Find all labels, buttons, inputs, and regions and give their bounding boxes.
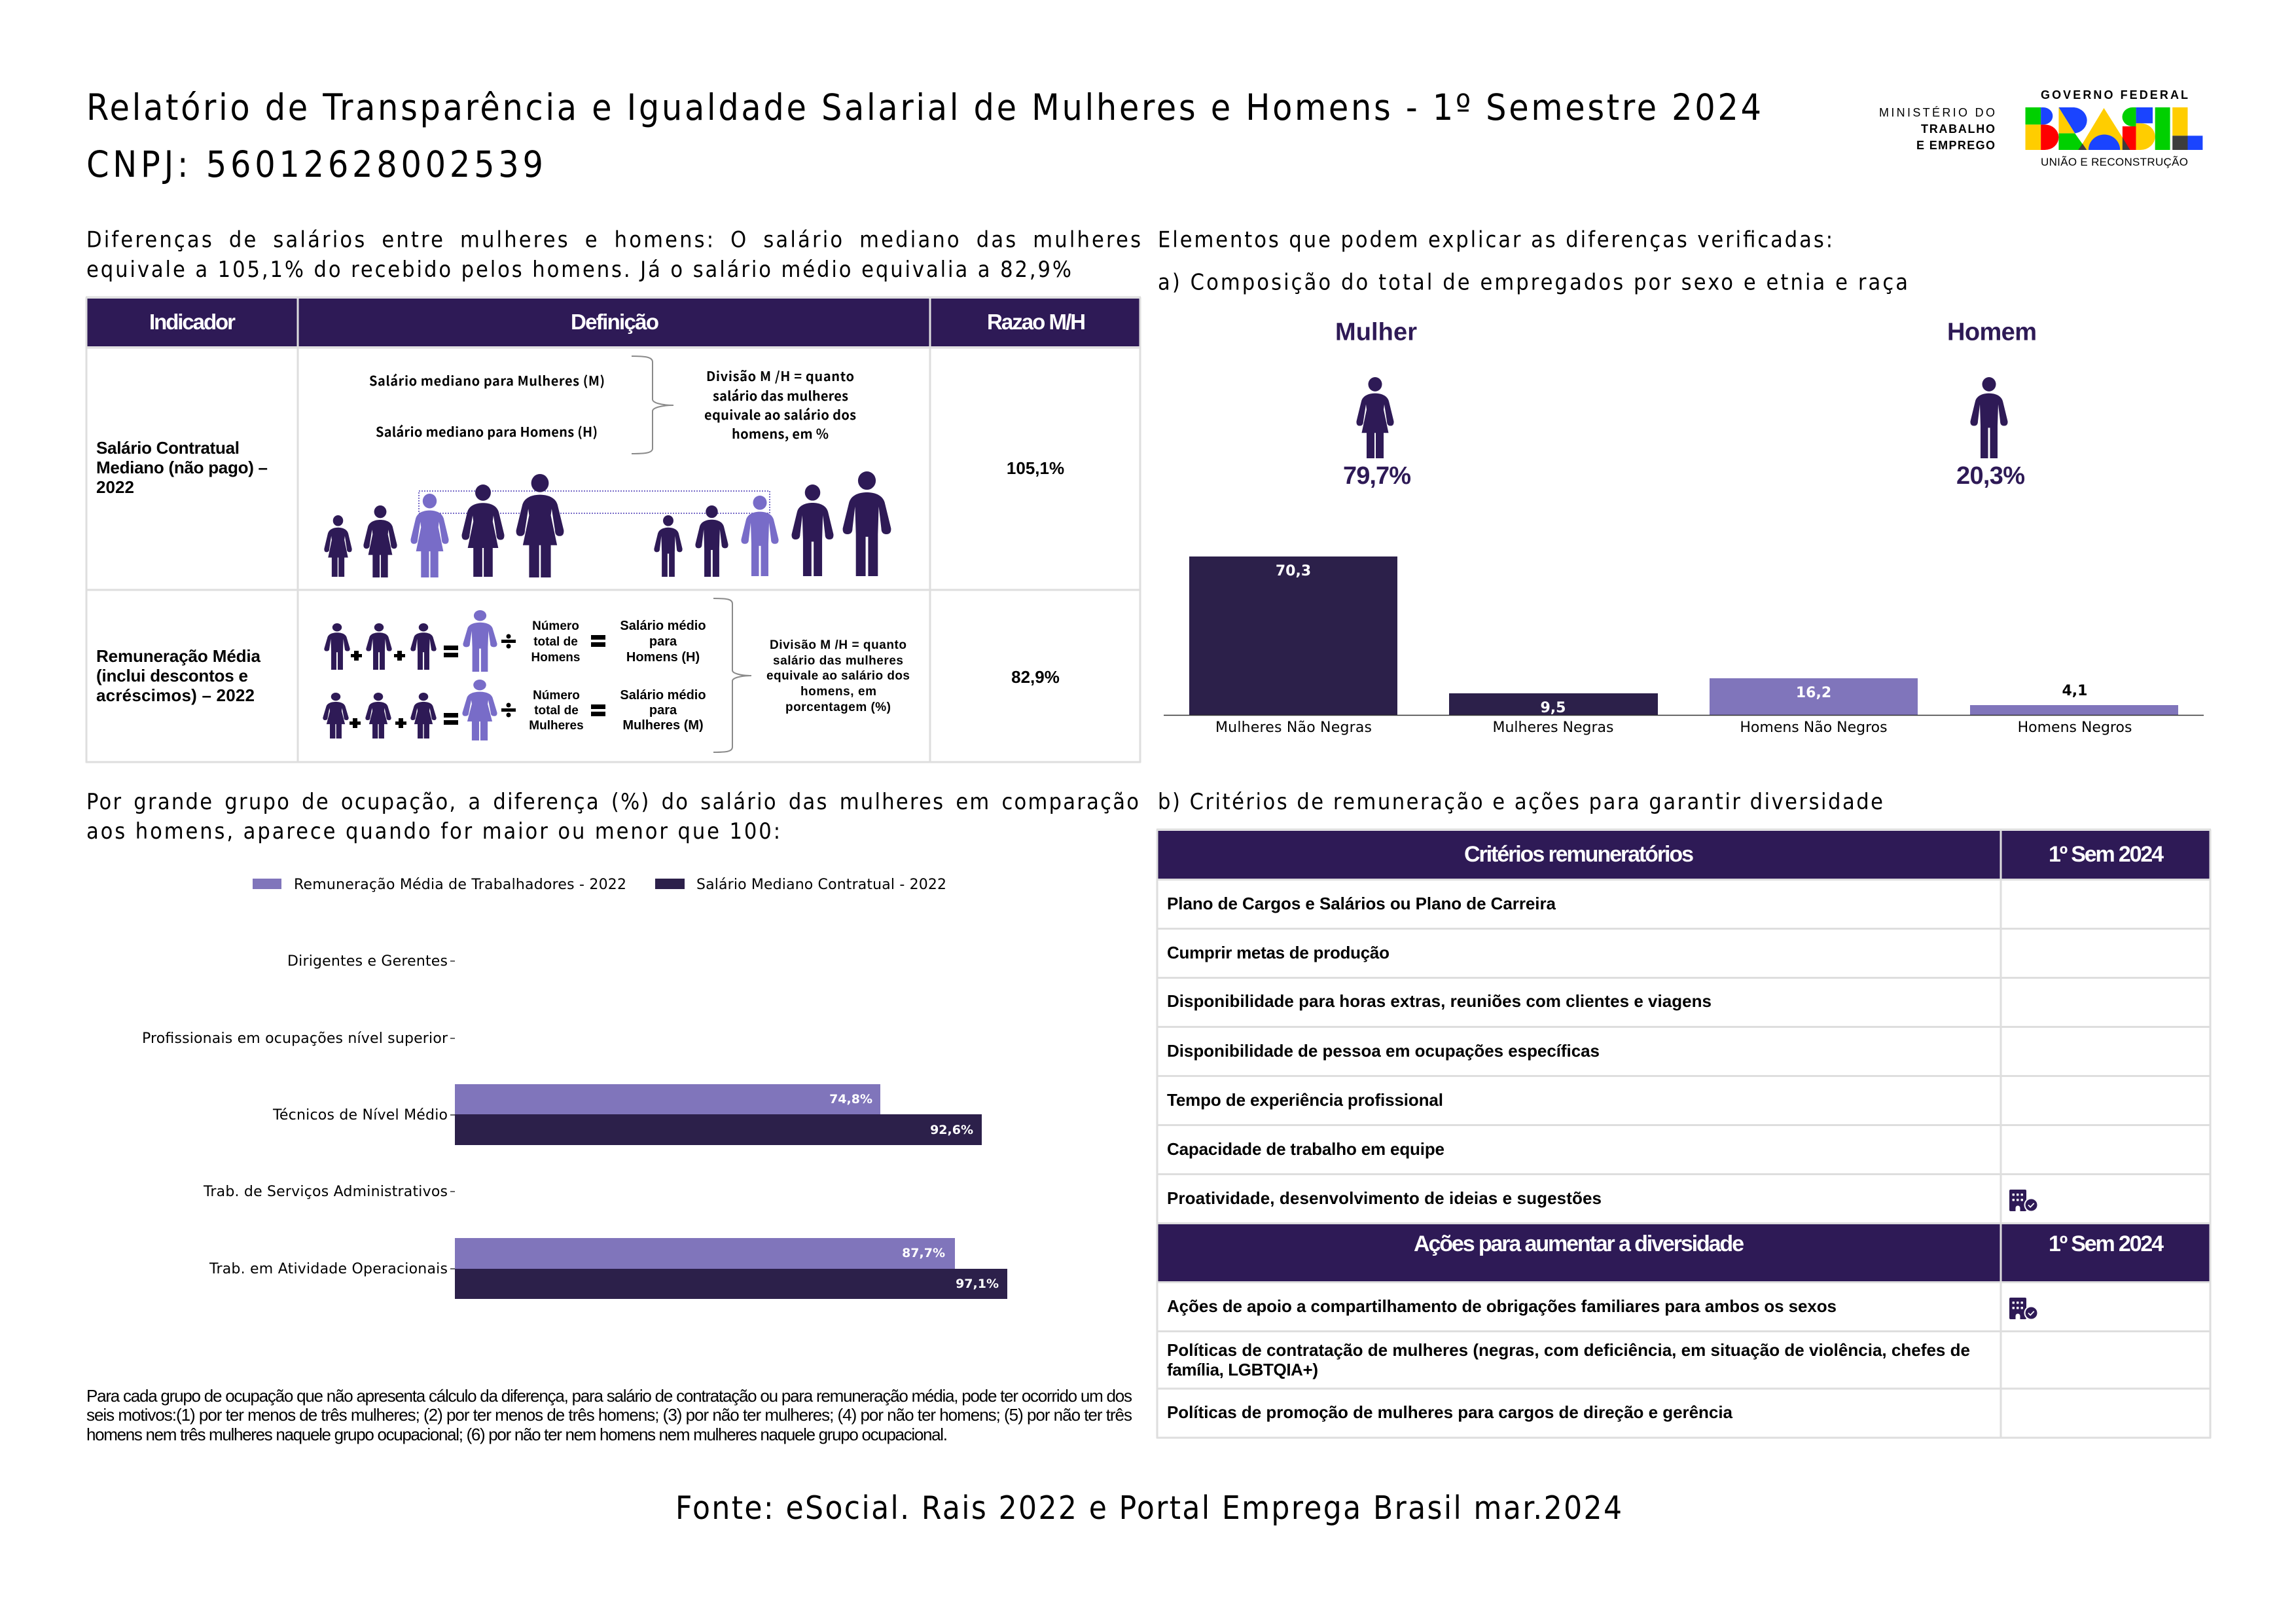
ministry name: E EMPREGO — [1916, 139, 1995, 152]
criteria list: Plano de Cargos e Salários ou Plano de Carreira — [1167, 894, 1556, 913]
criteria list: Capacidade de trabalho em equipe — [1167, 1139, 1444, 1159]
slogan: UNIÃO E RECONSTRUÇÃO — [2041, 156, 2188, 168]
axis labels — [1215, 720, 2132, 736]
bars: técnicos de nível médio: 92,6% — [930, 1123, 973, 1137]
explanation: divisão média — [766, 638, 910, 714]
explanation: divisão média: homens, em — [800, 685, 876, 699]
actions list: Políticas de contratação de mulheres (negras, com deficiência, em situação de violência, chefes de — [1167, 1340, 1970, 1360]
row label: salário contratual mediano: Mediano (não pago) – — [96, 458, 268, 477]
bars: técnicos de nível médio: 74,8% — [829, 1092, 872, 1106]
footnote — [86, 1386, 1132, 1444]
ministry name: MINISTÉRIO DO — [1879, 106, 1995, 119]
logo: ministério e governo federal — [1879, 88, 2202, 168]
heading: mulher: Mulher — [1335, 318, 1417, 346]
axis labels: Homens Negros — [2018, 720, 2132, 736]
bar: homens negros — [1970, 683, 2178, 715]
axis labels: Mulheres Negras — [1492, 720, 1614, 736]
heading: critérios de remuneração: b) Critérios de remuneração e ações para garantir diversidade — [1158, 789, 1883, 815]
government text: GOVERNO FEDERAL — [2041, 88, 2188, 101]
bar chart: composição por sexo e raça — [1164, 556, 2204, 736]
criteria list — [1167, 894, 1712, 1208]
table header: Razao M/H — [987, 310, 1086, 334]
heading: elementos explicativos — [1158, 227, 1908, 296]
table header: Definição — [571, 310, 659, 334]
source note: Fonte: eSocial. Rais 2022 e Portal Emprega Brasil mar.2024 — [675, 1489, 1622, 1527]
panel: tabela de indicadores — [86, 297, 1141, 763]
intro text: grande grupo de ocupação: Por grande grupo de ocupação, a diferença (%) do salário das mulheres em comparação — [86, 789, 1139, 815]
criteria list: Tempo de experiência profissional — [1167, 1090, 1443, 1110]
value: razão média: 82,9% — [1011, 667, 1060, 687]
bars: trabalhadores em atividade operacional — [455, 1238, 1007, 1299]
axis labels: Técnicos de Nível Médio — [272, 1107, 448, 1123]
formula: média mulheres: Mulheres (M) — [622, 718, 704, 733]
bar: mulheres não negras: 70,3 — [1276, 563, 1311, 579]
header: critérios remuneratórios: 1º Sem 2024 — [2049, 842, 2164, 867]
explanation: divisão mediano: Divisão M /H = quanto — [706, 366, 854, 385]
value: percentual mulheres: 79,7% — [1343, 462, 1411, 490]
row label: remuneração média: Remuneração Média — [96, 646, 261, 666]
ministry name: TRABALHO — [1921, 122, 1995, 136]
icon: homem — [1970, 377, 2008, 458]
formula: média homens: para — [649, 634, 677, 649]
formula: média homens: total de — [533, 635, 578, 649]
formula: média homens — [324, 610, 706, 672]
pictogram: medianas de mulheres e homens — [324, 471, 891, 577]
header: ações para aumentar a diversidade: Ações para aumentar a diversidade — [1414, 1231, 1744, 1256]
icon: mulher — [1356, 377, 1394, 458]
formula: média homens: Salário médio — [620, 619, 706, 633]
intro text: diferenças de salários — [86, 227, 1141, 283]
brace: mediano — [632, 356, 673, 454]
axis labels: Trab. de Serviços Administrativos — [203, 1184, 448, 1200]
explanation: divisão média: salário das mulheres — [773, 654, 903, 668]
legend: Remuneração Média de Trabalhadores - 2022 — [294, 877, 626, 893]
formula labels: mediano — [369, 371, 605, 441]
legend — [253, 877, 946, 893]
axis labels: Dirigentes e Gerentes — [287, 953, 448, 970]
panel: mulher — [1335, 318, 1417, 490]
criteria list: Proatividade, desenvolvimento de ideias e sugestões — [1167, 1188, 1602, 1208]
brace: média — [713, 598, 751, 752]
heading: elementos explicativos: Elementos que podem explicar as diferenças verificadas: — [1158, 227, 1833, 253]
formula: média mulheres — [323, 680, 706, 740]
formula: média mulheres: total de — [534, 704, 579, 718]
title: Relatório de Transparência e Igualdade Salarial de Mulheres e Homens - 1º Semestre 2024 — [86, 86, 1761, 128]
actions list — [1167, 1296, 1970, 1422]
icon: empresa com verificação, ações de apoio — [2009, 1298, 2038, 1320]
intro text: diferenças de salários: equivale a 105,1% do recebido pelos homens. Já o salário médio equivalia a 82,9% — [86, 257, 1071, 283]
axis labels: Profissionais em ocupações nível superior — [142, 1030, 448, 1047]
bars: trabalhadores em atividade operacional: 97,1% — [956, 1277, 999, 1291]
legend: Salário Mediano Contratual - 2022 — [696, 877, 946, 893]
bar: homens negros: 4,1 — [2062, 683, 2087, 699]
header: ações para aumentar a diversidade — [1157, 1224, 2210, 1281]
bar: mulheres negras: 9,5 — [1541, 700, 1566, 716]
bars: trabalhadores em atividade operacional: 87,7% — [902, 1246, 945, 1260]
criteria list: Disponibilidade de pessoa em ocupações específicas — [1167, 1041, 1600, 1061]
footnote: homens nem três mulheres naquele grupo ocupacional; (6) por não ter nem homens nem mulheres naquele grupo ocupacional. — [86, 1425, 948, 1444]
bar chart: diferença por grupo de ocupação — [142, 877, 1007, 1299]
header: ações para aumentar a diversidade: 1º Sem 2024 — [2049, 1231, 2164, 1256]
formula labels: mediano: Salário mediano para Homens (H) — [376, 422, 598, 441]
bar: homens não negros: 16,2 — [1796, 685, 1831, 701]
explanation: divisão mediano: homens, em % — [732, 424, 829, 443]
axis labels — [142, 953, 455, 1277]
formula: média mulheres: Salário médio — [620, 688, 706, 702]
formula: média mulheres: para — [649, 703, 677, 718]
title: CNPJ: 56012628002539 — [86, 143, 543, 185]
row label: salário contratual mediano — [96, 438, 268, 497]
panel: tabela de critérios e ações — [1157, 830, 2211, 1438]
footnote: seis motivos:(1) por ter menos de três mulheres; (2) por ter menos de três homens; (3) por não ter mulheres; (4) por não ter homens; (5) por não ter três — [86, 1405, 1132, 1425]
row label: remuneração média: (inclui descontos e — [96, 666, 248, 685]
axis labels: Mulheres Não Negras — [1215, 720, 1372, 736]
actions list: Políticas de promoção de mulheres para cargos de direção e gerência — [1167, 1402, 1733, 1422]
explanation: divisão mediano — [704, 366, 856, 443]
title — [86, 86, 1761, 185]
header: critérios remuneratórios — [1157, 831, 2210, 879]
formula labels: mediano: Salário mediano para Mulheres (M) — [369, 371, 605, 390]
explanation: divisão média: porcentagem (%) — [785, 701, 891, 714]
actions list: Ações de apoio a compartilhamento de obrigações familiares para ambos os sexos — [1167, 1296, 1837, 1316]
intro text: diferenças de salários: Diferenças de salários entre mulheres e homens: O salário mediano das mulheres — [86, 227, 1141, 253]
criteria list: Disponibilidade para horas extras, reuniões com clientes e viagens — [1167, 991, 1712, 1011]
ministry name — [1879, 106, 1995, 152]
row label: remuneração média — [96, 646, 261, 705]
formula: média mulheres: Mulheres — [529, 719, 584, 733]
formula: média mulheres: Número — [533, 689, 580, 702]
icon: empresa com verificação, proatividade — [2009, 1190, 2038, 1213]
row label: salário contratual mediano: Salário Contratual — [96, 438, 240, 458]
formula: média homens: Número — [532, 619, 579, 633]
value: razão mediana: 105,1% — [1007, 458, 1064, 478]
header: critérios remuneratórios: Critérios remuneratórios — [1464, 842, 1694, 867]
table header — [86, 299, 1140, 346]
heading: homem: Homem — [1947, 318, 2037, 346]
actions list: família, LGBTQIA+) — [1167, 1360, 1318, 1379]
brasil logo mark — [2026, 107, 2202, 150]
value: percentual homens: 20,3% — [1956, 462, 2025, 490]
explanation: divisão mediano: equivale ao salário dos — [704, 405, 856, 424]
formula: média homens: Homens (H) — [626, 650, 700, 665]
explanation: divisão média: equivale ao salário dos — [766, 669, 910, 683]
bar: mulheres negras — [1449, 693, 1658, 716]
bar: homens não negros — [1710, 678, 1918, 715]
bar: mulheres não negras — [1189, 556, 1397, 715]
explanation: divisão média: Divisão M /H = quanto — [770, 638, 906, 652]
intro text: grande grupo de ocupação: aos homens, aparece quando for maior ou menor que 100: — [86, 818, 780, 845]
formula: média homens: Homens — [531, 651, 580, 665]
explanation: divisão mediano: salário das mulheres — [713, 386, 848, 405]
row label: salário contratual mediano: 2022 — [96, 477, 134, 497]
bars: técnicos de nível médio — [455, 1084, 982, 1145]
footnote: Para cada grupo de ocupação que não apresenta cálculo da diferença, para salário de contratação ou para remuneração média, pode ter ocorrido um dos — [86, 1386, 1132, 1406]
panel: homem — [1947, 318, 2037, 490]
axis labels: Trab. em Atividade Operacionais — [209, 1261, 448, 1277]
intro text: grande grupo de ocupação — [86, 789, 1139, 845]
criteria list: Cumprir metas de produção — [1167, 943, 1390, 962]
axis labels: Homens Não Negros — [1740, 720, 1888, 736]
table header: Indicador — [149, 310, 236, 334]
heading: elementos explicativos: a) Composição do total de empregados por sexo e etnia e raça — [1158, 270, 1908, 296]
row label: remuneração média: acréscimos) – 2022 — [96, 685, 255, 705]
